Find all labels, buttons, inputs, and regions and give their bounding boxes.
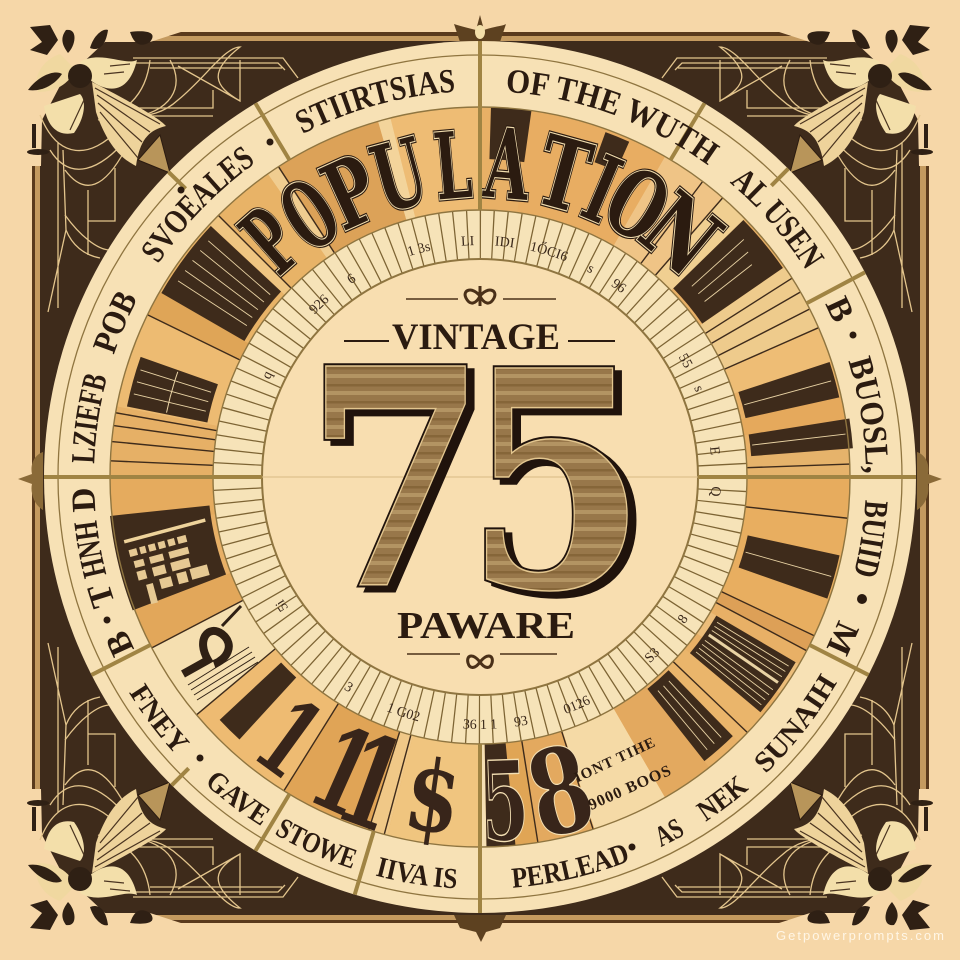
heading: POPULATION: I — [569, 135, 635, 244]
big numerals in the lower segments: 1 — [320, 704, 422, 862]
hairline across center — [262, 476, 698, 478]
tick scale labels: Q — [708, 487, 721, 496]
ring text: lower arc: GAVE — [208, 773, 270, 826]
ring text: upper arc: SVOEALES — [142, 146, 253, 262]
ring text: lower arc: NEK — [690, 769, 755, 828]
corner ornament: bottom left — [0, 643, 298, 955]
heading: POPULATION: O — [587, 145, 687, 266]
big number 75: shadow layer — [313, 310, 653, 662]
tick scale labels: 0126 — [564, 696, 590, 714]
subheading: PAWARE: PAWARE — [397, 605, 575, 647]
tick scale labels: 1ŐCI6 — [530, 242, 568, 261]
big numerals in the lower segments: 8 — [515, 718, 607, 867]
big numerals in the lower segments: 1 — [234, 675, 345, 803]
POPULATION core fill — [222, 106, 741, 297]
small label in cream segment: IONT TIHE — [572, 735, 659, 786]
cream inlay lines — [134, 239, 845, 750]
big number 75: cream inline — [306, 305, 646, 657]
tick scale labels: 36 1 1 — [463, 719, 496, 729]
icon: right frame ornament — [917, 452, 942, 510]
icon: building grid — [124, 518, 223, 607]
ring dots — [104, 138, 867, 850]
big numerals in the lower segments: 1 — [293, 698, 394, 844]
tick scale labels: 8 — [678, 614, 688, 624]
tick scale labels: 55 — [679, 353, 693, 368]
tick scale labels: IDI — [495, 236, 515, 248]
tick scale labels: 93 — [514, 716, 528, 726]
big numerals in the lower segments — [234, 675, 607, 867]
heading: POPULATION: A — [480, 106, 535, 223]
heading: POPULATION: T — [524, 113, 602, 236]
big numerals in the lower segments: 5 — [479, 736, 531, 867]
tick scale labels: LI — [461, 236, 474, 246]
tick scale labels: 1 3s — [408, 243, 430, 256]
dark stripe lines — [110, 167, 850, 842]
tick scale labels: 96 — [611, 279, 626, 292]
ring text: upper arc: STIIRTSIAS — [296, 70, 454, 133]
tick scale labels: 926 — [309, 294, 328, 314]
ring text: upper arc: BUOSL, — [848, 355, 888, 472]
POPULATION cream inline — [222, 106, 741, 297]
tick scale labels: E — [710, 446, 720, 454]
heading: POPULATION — [222, 106, 741, 297]
big number 75: shadow layer: 5 — [473, 312, 653, 662]
tick scale labels: 5i — [276, 599, 288, 612]
corner ornament: top left — [0, 0, 298, 312]
tick scale labels: 6 — [348, 274, 356, 283]
icon: top frame ornament — [454, 15, 506, 42]
tick scale labels: 1 G02 — [387, 704, 420, 722]
ring text: lower arc: FNEY — [129, 682, 190, 752]
small label in cream segment — [572, 735, 674, 814]
big number 75: dark outline — [306, 305, 646, 657]
big number 75: shadow layer: 7 — [313, 310, 493, 660]
ring text: upper arc: M — [826, 620, 860, 657]
heading: POPULATION: N — [620, 171, 741, 297]
ring text: lower arc: STOWE — [276, 820, 357, 868]
tick scale labels: s — [694, 386, 702, 392]
tick scale labels — [264, 236, 721, 729]
ring text: upper arc: HNH — [74, 520, 106, 580]
ring text: upper arc: D — [72, 489, 96, 512]
watermark: Getpowerprompts.com — [776, 928, 944, 943]
heading: POPULATION: P — [307, 133, 395, 252]
tick scale labels: 3 — [344, 682, 353, 692]
ring text: lower arc — [129, 655, 837, 888]
ring text: lower arc: AS — [649, 812, 689, 854]
icon: left frame ornament — [18, 452, 43, 510]
ring text: upper arc: LZIEFB — [72, 374, 106, 464]
ring text: upper arc: AL USEN — [730, 171, 825, 268]
ring text: upper arc: B — [108, 632, 134, 658]
tick scale labels: q — [264, 372, 275, 379]
icon: bottom frame ornament — [454, 915, 506, 942]
ring text: upper arc: OF THE WUTH — [508, 70, 720, 166]
heading: POPULATION: L — [430, 110, 476, 222]
heading: POPULATION: P — [222, 189, 321, 294]
ornament: top flourish — [406, 286, 556, 306]
tick scale labels: s — [587, 266, 594, 273]
ring text: upper arc: B — [825, 294, 852, 322]
small label in cream segment: 9000 BOOS — [586, 762, 674, 814]
tick scale labels: S3 — [645, 648, 659, 662]
heading: POPULATION: O — [262, 158, 358, 273]
big number 75: striped fill — [306, 305, 646, 657]
corner ornament: bottom right — [662, 643, 960, 955]
ring text: upper arc: POB — [92, 292, 136, 354]
heading: POPULATION: U — [361, 118, 438, 235]
big numerals in the lower segments: $ — [398, 736, 468, 857]
ring text: upper arc: BUIID — [856, 500, 888, 576]
ring text: lower arc: PERLEAD — [511, 845, 628, 888]
ring text: lower arc: IIVA IS — [376, 857, 456, 888]
heading: VINTAGE: VINTAGE — [392, 317, 560, 358]
icon: key-like emblem — [183, 606, 258, 700]
corner ornament: top right — [662, 0, 960, 312]
ring text: upper arc — [72, 70, 888, 669]
panel: tick scale ring — [213, 210, 747, 744]
ornament: bottom flourish — [407, 654, 557, 667]
ring text: upper arc: T — [87, 586, 114, 610]
ring text: lower arc: SUNAIH — [746, 666, 847, 782]
